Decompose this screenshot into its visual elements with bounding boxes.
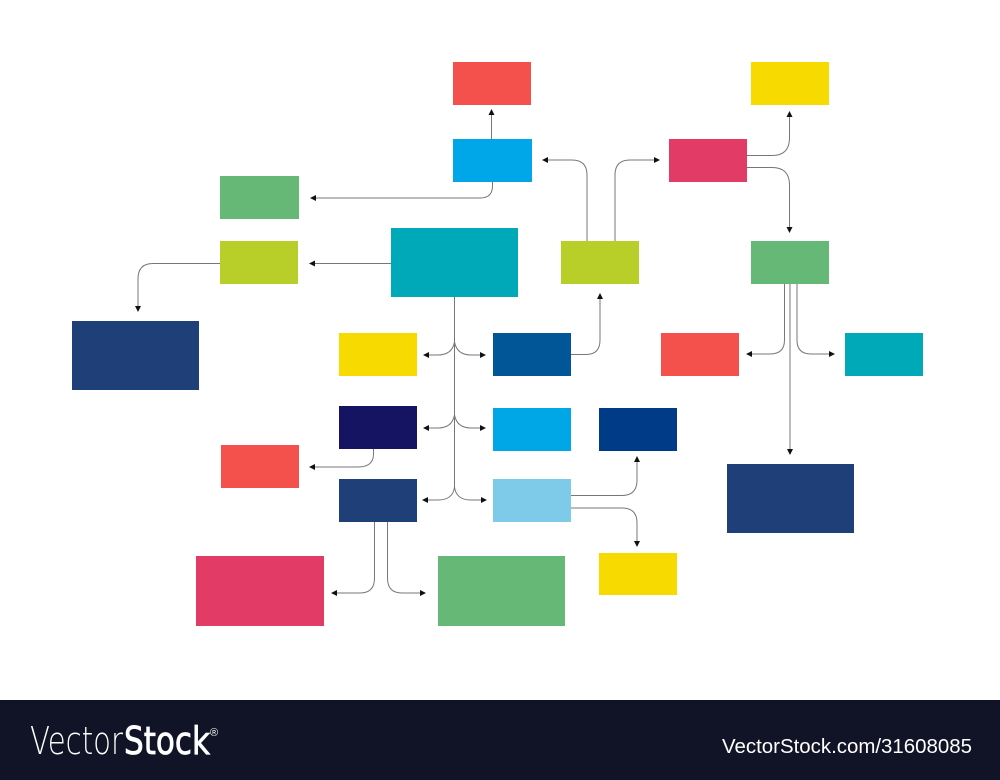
box: pink top right bbox=[669, 139, 747, 182]
box: yellow top right bbox=[751, 62, 829, 105]
box: lime left bbox=[220, 241, 298, 284]
footer logo: Stock bbox=[124, 719, 210, 763]
box: central teal bbox=[391, 228, 518, 297]
main vertical trunk bbox=[454, 297, 456, 487]
box: lime right bbox=[561, 241, 639, 284]
box: navy far left bbox=[72, 321, 199, 390]
box: green left bbox=[220, 176, 299, 219]
box: navy middle right bbox=[599, 408, 677, 451]
box: pink bottom bbox=[196, 556, 324, 626]
footer url: VectorStock.com/31608085 bbox=[722, 736, 972, 758]
box: light blue lower middle bbox=[493, 479, 571, 522]
box: yellow middle bbox=[339, 333, 417, 376]
box: sky blue middle bbox=[493, 408, 571, 451]
footer bar bbox=[0, 700, 1000, 780]
box: blue top bbox=[453, 139, 532, 182]
box: red top bbox=[453, 62, 531, 105]
box: green bottom bbox=[438, 556, 565, 626]
box: navy lower middle bbox=[339, 479, 417, 522]
box: blue middle bbox=[493, 333, 571, 376]
box: dark navy middle bbox=[339, 406, 417, 449]
box: yellow bottom bbox=[599, 553, 677, 595]
footer logo: Vector bbox=[30, 719, 123, 763]
box: red right bbox=[661, 333, 739, 376]
box: navy lower right bbox=[727, 464, 854, 533]
footer logo bbox=[30, 719, 210, 763]
registered mark: ® bbox=[210, 727, 218, 739]
box: red lower left bbox=[221, 445, 299, 488]
box: green right bbox=[751, 241, 829, 284]
box: teal right bbox=[845, 333, 923, 376]
connectors bbox=[138, 110, 834, 593]
